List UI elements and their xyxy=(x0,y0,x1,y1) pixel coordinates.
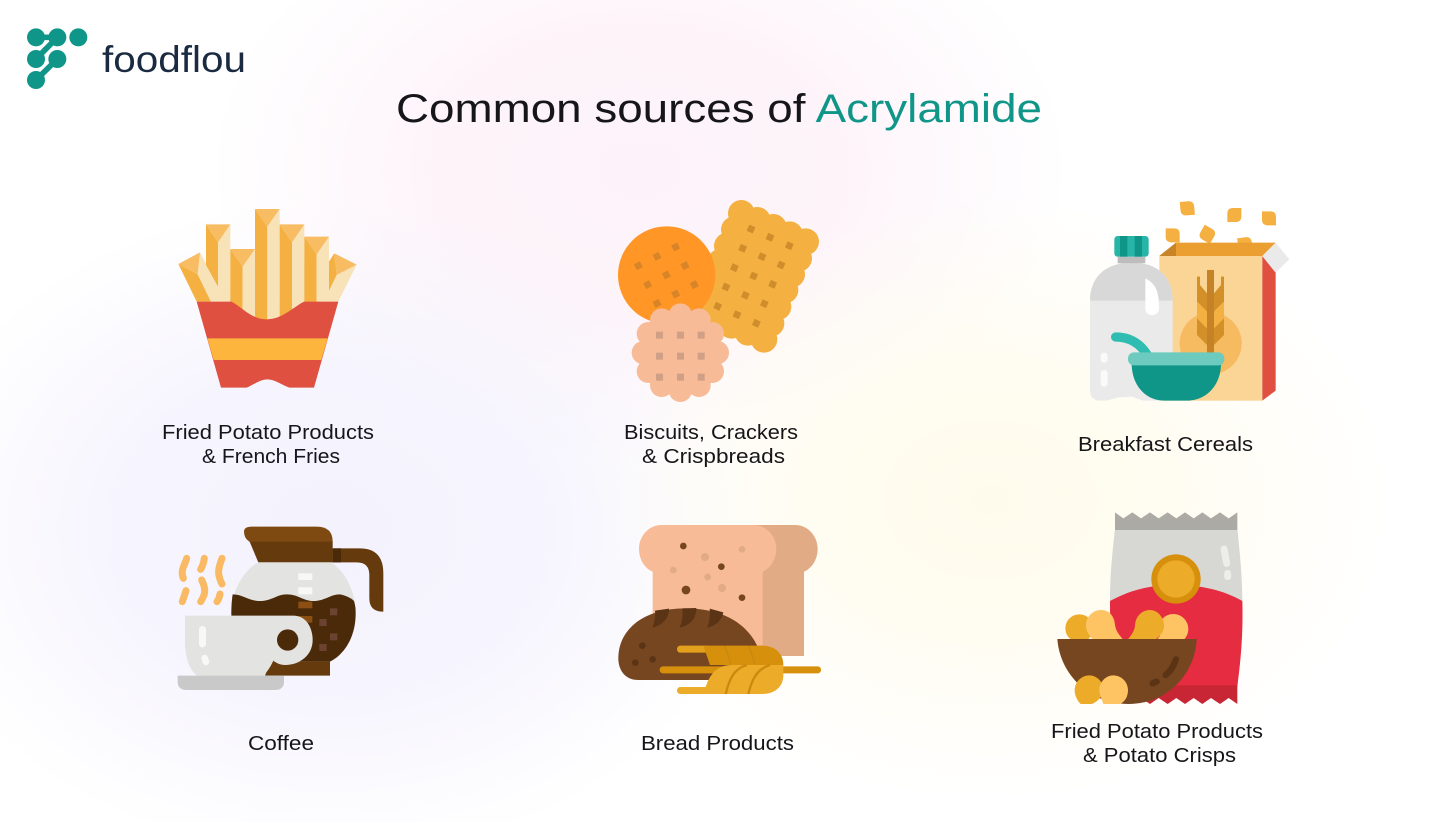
icon: crisps bag and bowl xyxy=(1057,512,1243,704)
panel: fried potato products and french fries xyxy=(162,209,374,468)
label: & Crispbreads xyxy=(642,445,785,468)
label: Biscuits, Crackers xyxy=(624,421,798,444)
label: Bread Products xyxy=(641,732,794,755)
icon: french fries xyxy=(178,209,357,388)
label: Fried Potato Products xyxy=(162,421,374,444)
icon: coffee pot and cup xyxy=(178,527,383,690)
label xyxy=(1051,720,1263,767)
icon: cereal box, milk and bowl xyxy=(1090,201,1289,401)
panel: bread products xyxy=(618,525,821,755)
label: Coffee xyxy=(248,732,314,755)
logo: foodflou xyxy=(27,28,246,89)
panel: breakfast cereals xyxy=(1078,201,1289,456)
label: & Potato Crisps xyxy=(1083,744,1236,767)
icon: bread and wheat xyxy=(618,525,821,694)
label xyxy=(162,421,374,468)
logo wordmark: foodflou xyxy=(102,39,246,80)
title: Common sources of Acrylamide xyxy=(396,87,1042,131)
label xyxy=(624,421,798,468)
panel: biscuits, crackers and crispbreads xyxy=(618,200,819,468)
icon: biscuits xyxy=(618,200,819,402)
logo mark xyxy=(27,28,87,89)
label: & French Fries xyxy=(202,445,340,468)
panel: coffee xyxy=(178,527,383,755)
panel: fried potato products and potato crisps xyxy=(1051,512,1263,767)
label: Fried Potato Products xyxy=(1051,720,1263,743)
label: Breakfast Cereals xyxy=(1078,433,1253,456)
